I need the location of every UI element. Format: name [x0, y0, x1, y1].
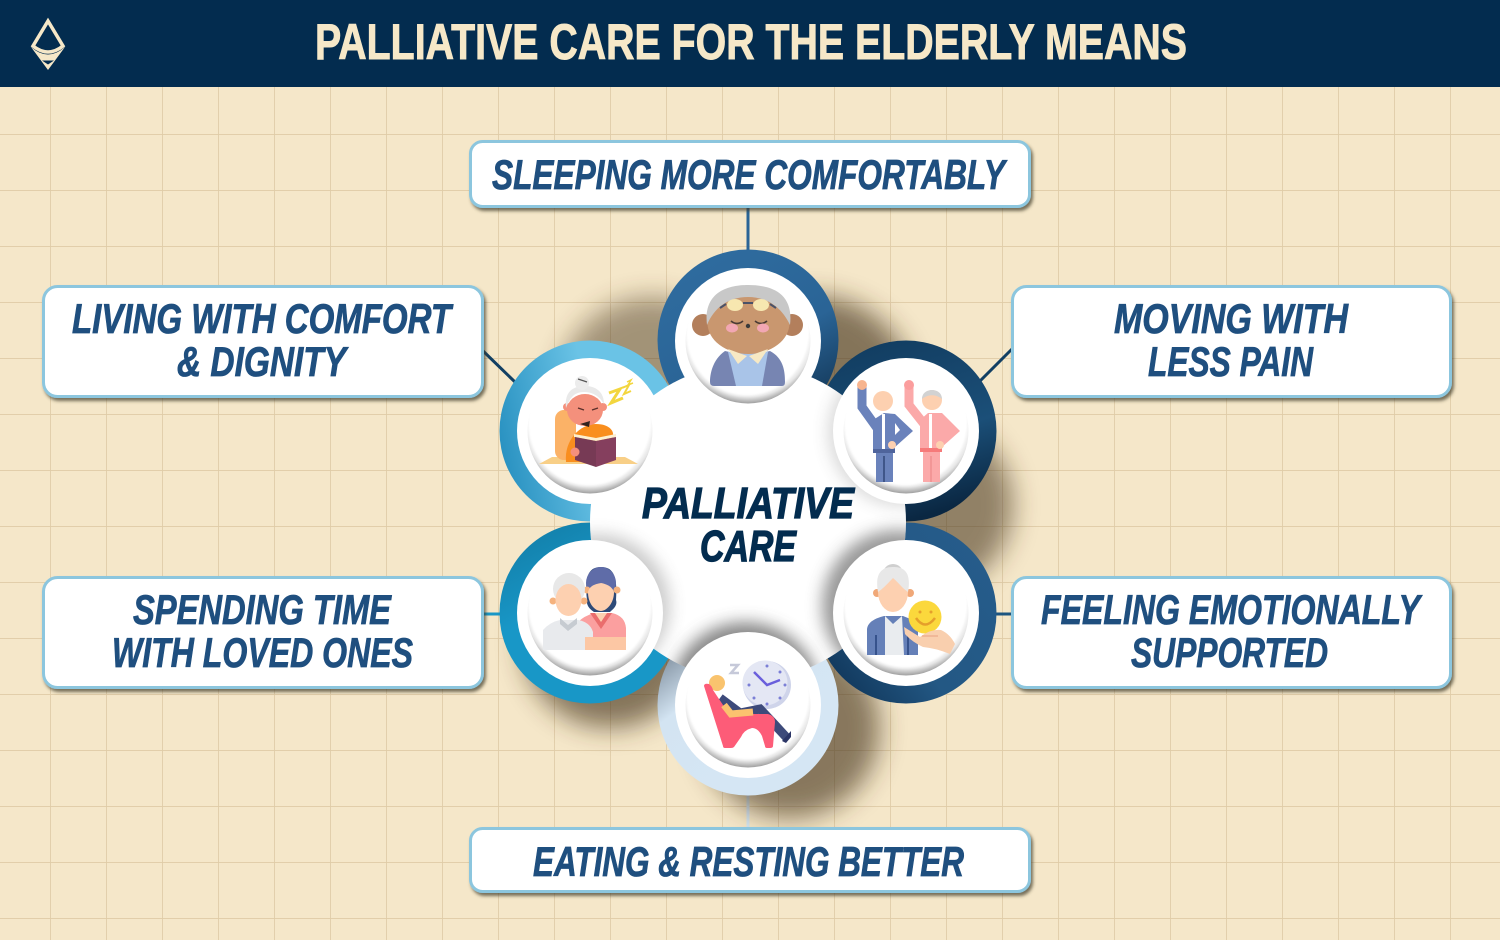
icon: clock — [742, 660, 791, 709]
panel: spending time with loved ones: SPENDING TIME — [133, 586, 393, 633]
rings — [500, 250, 996, 796]
panel: eating and resting better — [470, 828, 1030, 892]
panel: left circle, woman dozing with book — [517, 358, 663, 504]
panel: spending time with loved ones — [44, 578, 482, 688]
panel: lower-left circle, two people together — [517, 540, 663, 686]
panel: sleeping more comfortably: SLEEPING MORE COMFORTABLY — [492, 151, 1008, 198]
icon: elderly man — [692, 285, 803, 386]
central white disc — [590, 364, 906, 680]
inner shadows on central disc — [590, 390, 906, 668]
panel: eating and resting better: EATING & RESTING BETTER — [533, 838, 964, 885]
icon: man moving — [857, 380, 913, 482]
icon: logo diamond — [31, 21, 65, 70]
panel: moving with less pain — [1012, 286, 1450, 396]
header band — [0, 0, 1500, 87]
panel: living with comfort and dignity: LIVING WITH COMFORT — [72, 295, 454, 342]
icon: woman reading — [539, 376, 638, 467]
panel: lower-right circle, elder with smiley — [833, 540, 979, 686]
panel: sleeping more comfortably — [470, 142, 1030, 206]
panel: top circle, elderly man — [675, 268, 821, 414]
panel: living with comfort and dignity — [44, 286, 482, 396]
panel: moving with less pain: LESS PAIN — [1148, 338, 1314, 385]
icon: woman and elder — [543, 567, 626, 650]
central label: PALLIATIVE — [642, 479, 855, 528]
title: PALLIATIVE CARE FOR THE ELDERLY MEANS — [315, 14, 1187, 70]
panel: right circle, couple with raised arms — [833, 358, 979, 504]
connector lines — [481, 205, 1012, 829]
panel: bottom circle, person resting in armchair — [675, 632, 821, 778]
central label — [642, 479, 855, 571]
soft cast shadows — [522, 296, 1013, 818]
panel: moving with less pain: MOVING WITH — [1114, 295, 1349, 342]
central label: CARE — [700, 522, 797, 571]
icon: elder receiving support — [867, 564, 955, 655]
icon: woman moving — [904, 380, 960, 482]
panel: living with comfort and dignity: & DIGNITY — [177, 338, 349, 385]
panel: spending time with loved ones: WITH LOVED ONES — [112, 629, 413, 676]
panel: feeling emotionally supported: SUPPORTED — [1131, 629, 1328, 676]
panel: feeling emotionally supported — [1012, 578, 1450, 688]
icon: sleeping person in armchair — [704, 665, 791, 748]
